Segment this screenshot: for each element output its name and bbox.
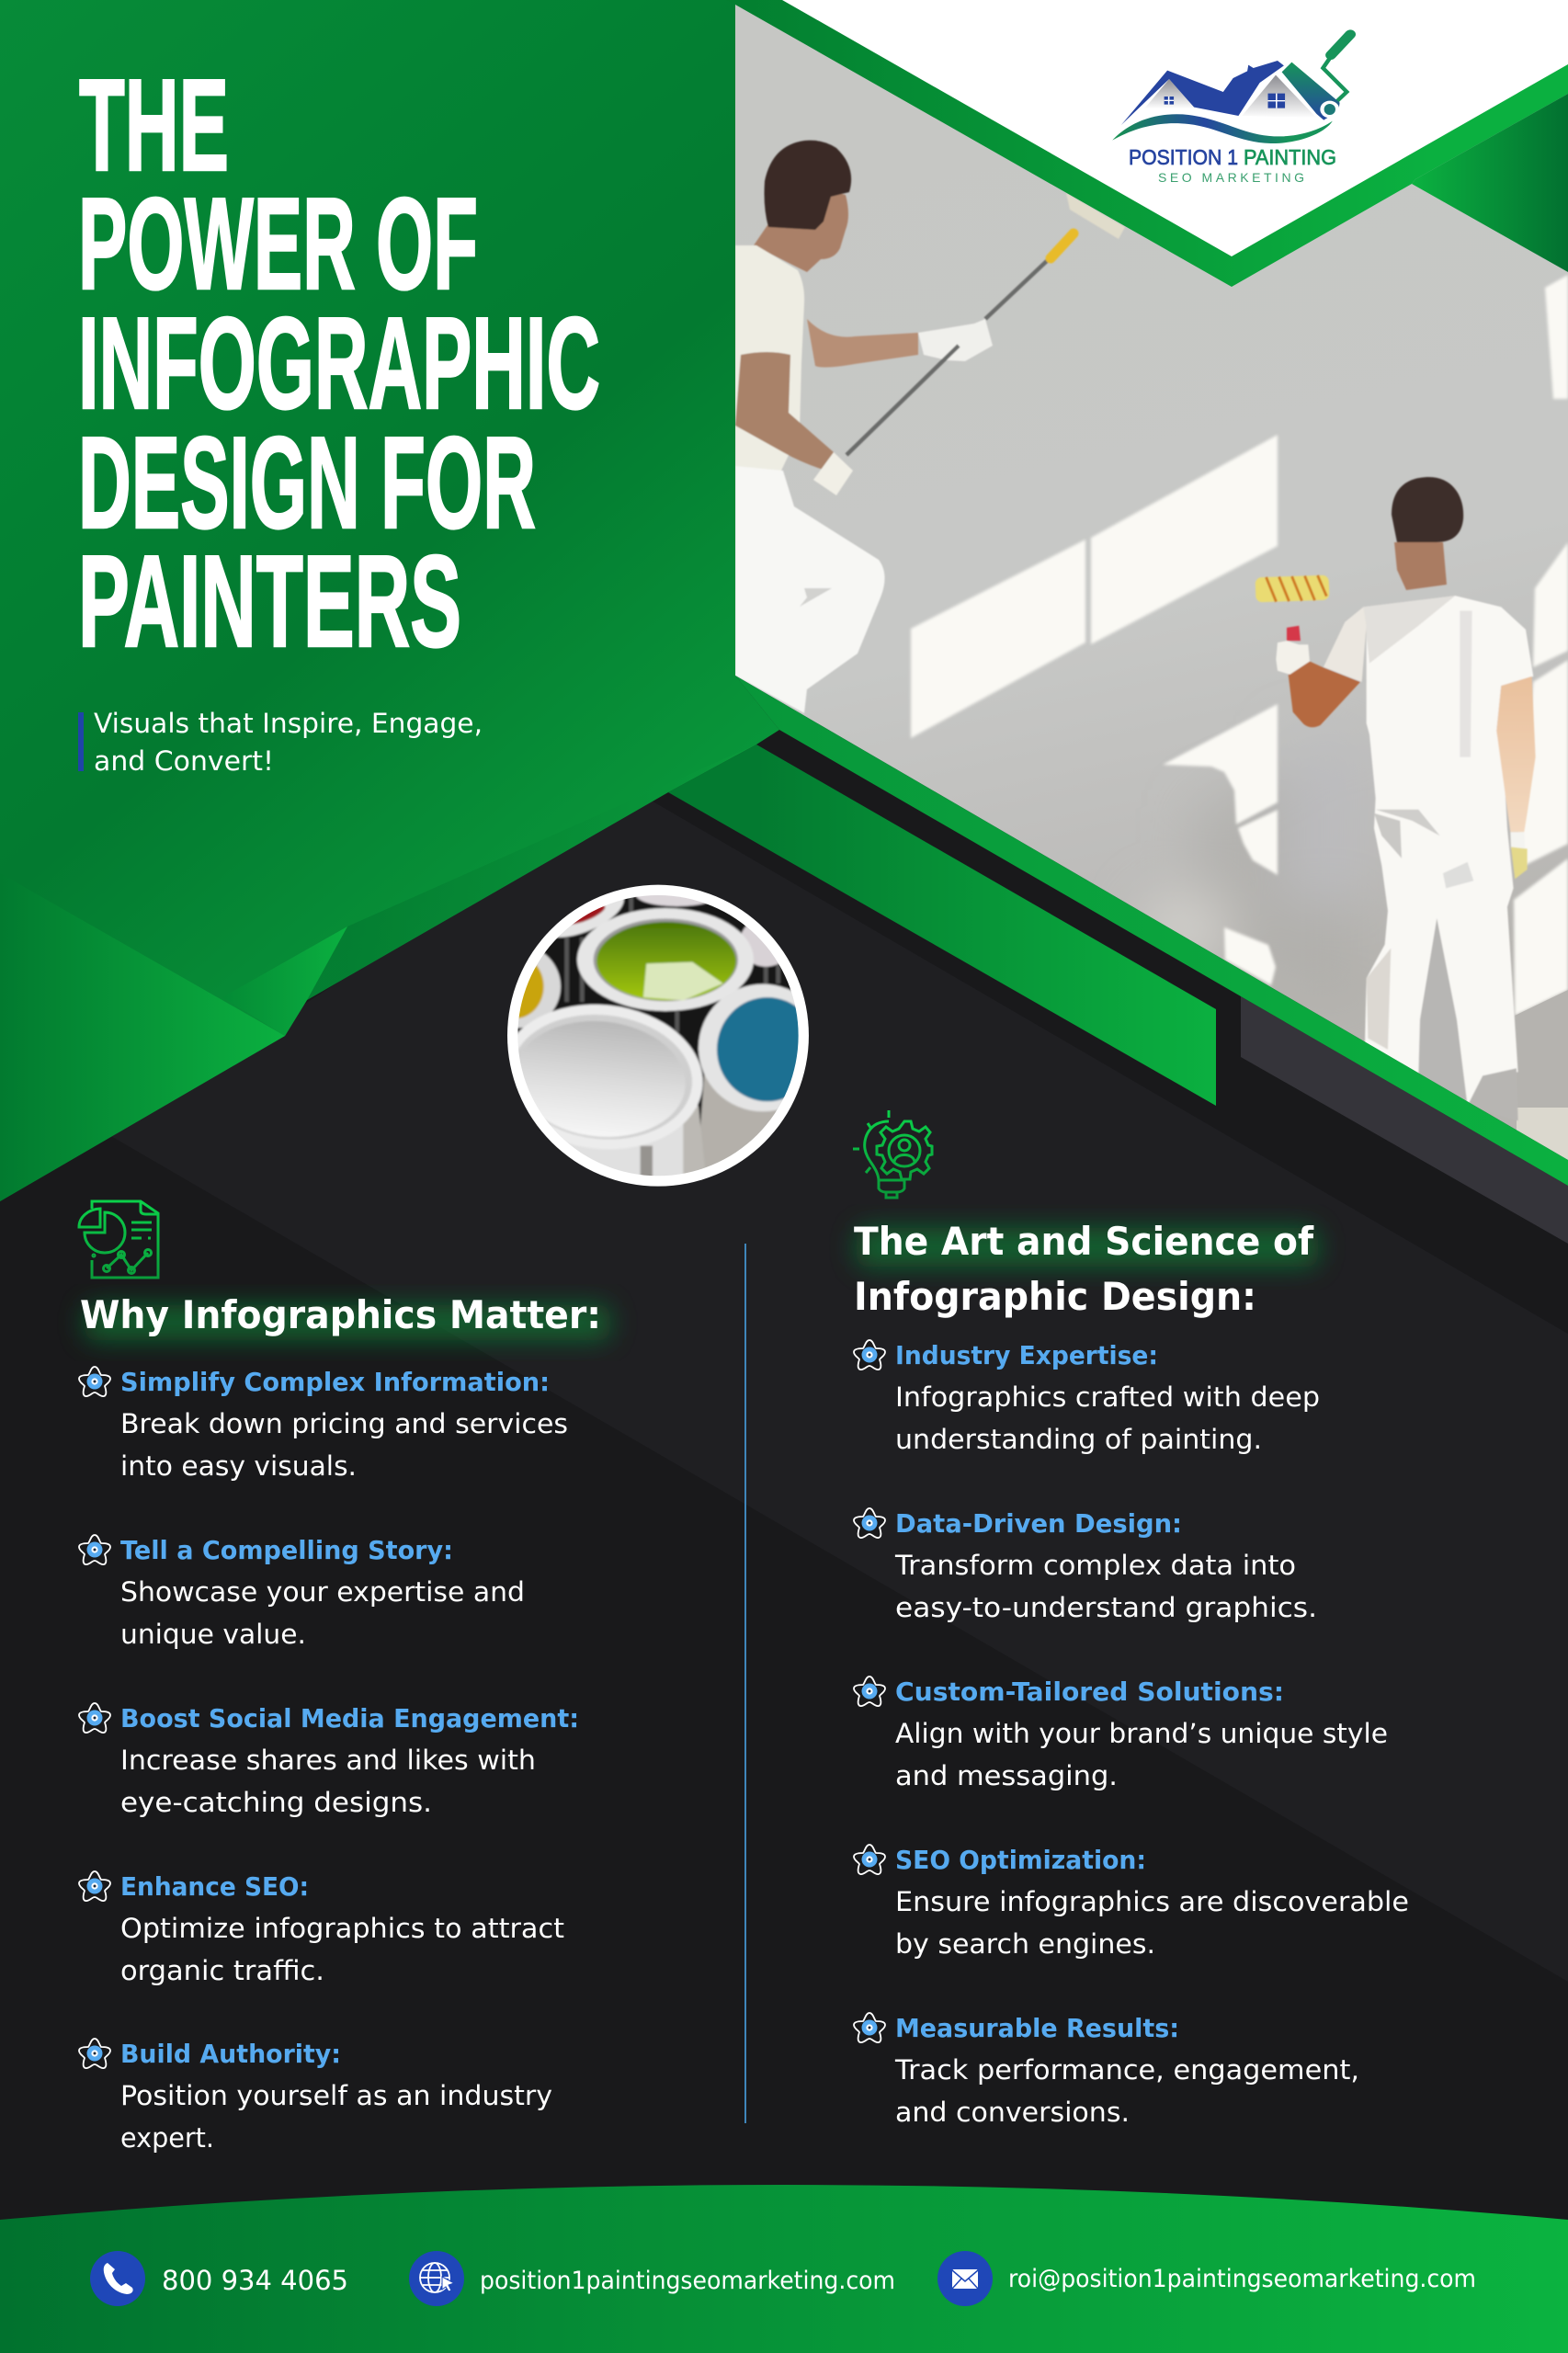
black stripe below main band — [634, 730, 1568, 1334]
gap between legs — [1418, 918, 1468, 1106]
logo wordmark blue: POSITION 1 — [1129, 145, 1238, 169]
item: custom-tailored solutions: Align with your brand’s unique style — [895, 1718, 1388, 1749]
wall — [735, 0, 1568, 1195]
item: measurable results: and conversions. — [895, 2097, 1130, 2128]
item: build authority: Position yourself as an industry — [120, 2080, 552, 2111]
torso and legs — [1276, 596, 1536, 1151]
dark green corner — [1412, 94, 1568, 272]
cans — [478, 873, 827, 1195]
logo wordmark green: PAINTING — [1244, 145, 1336, 169]
contact: phone — [90, 2251, 348, 2306]
roof — [1121, 61, 1284, 125]
phone number: 800 934 4065 — [162, 2265, 348, 2296]
roller — [1282, 63, 1340, 120]
lower wall to the right — [1515, 990, 1568, 1017]
item: simplify complex information: Simplify Complex Information: — [120, 1367, 550, 1397]
item: tell a compelling story: unique value. — [120, 1619, 306, 1650]
column divider — [744, 1244, 746, 2123]
painter on the right — [1256, 477, 1536, 1151]
white can body — [542, 1073, 699, 1195]
icon: envelope — [937, 2251, 993, 2306]
hair — [1392, 477, 1463, 542]
blue paint — [717, 997, 818, 1101]
title: PAINTERS — [78, 529, 461, 675]
item: data-driven design: easy-to-understand graphics. — [895, 1592, 1317, 1623]
item: enhance SEO — [79, 1871, 564, 1986]
heading: The Art and Science of — [854, 1219, 1314, 1264]
gloves — [918, 319, 993, 361]
hair — [765, 141, 851, 230]
subtitle accent bar — [78, 712, 84, 771]
gradient green band — [668, 745, 1216, 1106]
white roller — [1066, 193, 1125, 239]
item: SEO optimization: SEO Optimization: — [895, 1845, 1146, 1875]
item: data-driven design: Transform complex data into — [894, 1550, 1296, 1581]
roller handle — [1323, 49, 1346, 108]
roller pole — [846, 259, 1049, 455]
far arm — [807, 319, 918, 368]
roller sleeve — [1256, 575, 1329, 602]
yellow handle — [1051, 233, 1074, 258]
panel: why infographics matter — [79, 1201, 610, 2154]
icon: lightbulb with gear and person — [853, 1110, 932, 1198]
item: build authority: expert. — [120, 2122, 214, 2154]
white paint — [510, 1013, 691, 1145]
wall shading — [1140, 807, 1267, 963]
item: data-driven design — [854, 1508, 1317, 1623]
forearm — [1289, 662, 1360, 727]
item: custom-tailored solutions: and messaging. — [895, 1760, 1118, 1791]
lighter strip along panel edge — [307, 745, 756, 1000]
white logo chevron — [782, 0, 1568, 256]
item: SEO optimization: Ensure infographics are discoverable — [895, 1886, 1409, 1917]
near arm — [735, 352, 834, 472]
green chevron band — [726, 0, 1568, 287]
fold shadows — [1460, 610, 1472, 757]
paint cans circle photo — [478, 873, 827, 1195]
green paint — [597, 922, 736, 1000]
main green diagonal band — [735, 676, 1568, 1186]
top pale can — [636, 883, 719, 906]
right arm — [1496, 676, 1536, 832]
contact: email — [937, 2251, 1476, 2306]
title: THE — [79, 52, 229, 199]
green reflection — [643, 962, 723, 1000]
icon: document with charts — [79, 1201, 158, 1278]
subtitle: Visuals that Inspire, Engage, — [94, 708, 483, 739]
logo tagline: SEO MARKETING — [1158, 170, 1304, 185]
floor — [1517, 1108, 1568, 1160]
white ring — [507, 885, 809, 1187]
pants — [735, 466, 885, 713]
red can — [534, 879, 631, 948]
item: measurable results: Measurable Results: — [895, 2013, 1179, 2043]
item: boost social media engagement: Increase shares and likes with — [120, 1745, 536, 1776]
neck and face — [754, 188, 848, 272]
heading: Infographic Design: — [854, 1274, 1256, 1319]
sleeve — [1324, 607, 1367, 682]
item: custom-tailored solutions — [854, 1677, 1388, 1791]
shirt — [735, 245, 804, 471]
icon: phone — [90, 2251, 145, 2306]
item: enhance SEO: organic traffic. — [120, 1955, 324, 1986]
item: SEO optimization: by search engines. — [895, 1928, 1155, 1960]
yellow striped roller — [1256, 575, 1329, 602]
item: enhance SEO: Enhance SEO: — [120, 1871, 309, 1902]
item: simplify complex information: into easy visuals. — [120, 1450, 357, 1482]
item: custom-tailored solutions: Custom-Tailored Solutions: — [895, 1677, 1284, 1707]
item: industry expertise: understanding of painting. — [895, 1424, 1262, 1455]
item: build authority: Build Authority: — [120, 2039, 341, 2069]
item: measurable results — [854, 2013, 1359, 2128]
green can rim — [577, 908, 754, 1011]
item: data-driven design: Data-Driven Design: — [895, 1508, 1182, 1539]
footer band — [0, 2185, 1568, 2353]
item: industry expertise: Infographics crafted with deep — [895, 1381, 1320, 1413]
item: industry expertise — [854, 1340, 1320, 1455]
item: tell a compelling story — [79, 1535, 525, 1650]
bright left wedge — [0, 873, 285, 1201]
title — [78, 52, 600, 675]
logo: Position 1 Painting SEO Marketing — [1112, 34, 1350, 185]
work glove — [1510, 832, 1525, 849]
heading glow — [857, 1228, 1318, 1267]
white glove — [1276, 641, 1310, 675]
photo: two painters rolling a wall — [735, 0, 1568, 1195]
panel: the art and science of infographic design — [853, 1110, 1409, 2128]
lighter diagonal background panel — [0, 790, 1568, 1982]
heading — [854, 1219, 1314, 1319]
item: boost social media engagement: eye-catching designs. — [120, 1787, 432, 1818]
right pale can — [740, 917, 792, 967]
logo mark — [1112, 34, 1350, 143]
dark can sides — [567, 892, 778, 1032]
title: DESIGN FOR — [78, 410, 536, 556]
subtitle — [94, 708, 483, 777]
yellow can — [478, 945, 561, 1028]
item: tell a compelling story: Showcase your expertise and — [120, 1576, 525, 1608]
shadow on shoulders — [1363, 596, 1455, 664]
blue can body — [696, 1069, 818, 1195]
item: enhance SEO: Optimize infographics to attract — [120, 1913, 564, 1944]
white can rim — [494, 995, 710, 1159]
icon: globe — [409, 2251, 464, 2306]
shirt and trousers silhouette — [1363, 596, 1533, 1151]
heading: Why Infographics Matter: — [80, 1292, 601, 1337]
neck — [1394, 542, 1447, 590]
gables — [1144, 79, 1196, 108]
sunlight window patches — [911, 275, 1568, 1016]
title: INFOGRAPHIC — [78, 290, 600, 437]
item: boost social media engagement: Boost Social Media Engagement: — [120, 1703, 579, 1733]
email address: roi@position1paintingseomarketing.com — [1008, 2265, 1476, 2293]
red handle — [1287, 626, 1301, 641]
item: industry expertise: Industry Expertise: — [895, 1340, 1158, 1370]
left green panel — [0, 0, 779, 1201]
small accent triangle — [222, 926, 347, 1036]
item: simplify complex information — [79, 1367, 568, 1482]
heading glow — [85, 1305, 610, 1340]
subtitle: and Convert! — [94, 745, 274, 777]
title: POWER OF — [78, 171, 478, 317]
painter on the left — [735, 141, 1125, 713]
contact: website — [409, 2251, 895, 2306]
swoosh — [1112, 114, 1333, 143]
item: boost social media engagement — [79, 1703, 579, 1818]
item: tell a compelling story: Tell a Compelling Story: — [120, 1535, 453, 1565]
item: build authority — [79, 2039, 552, 2154]
grey stripe — [1241, 996, 1568, 1244]
website address: position1paintingseomarketing.com — [480, 2267, 895, 2295]
item: SEO optimization — [854, 1845, 1409, 1960]
windows — [1165, 94, 1285, 108]
item: measurable results: Track performance, engagement, — [894, 2054, 1359, 2086]
blue can rim — [699, 984, 827, 1111]
item: simplify complex information: Break down pricing and services — [120, 1408, 568, 1439]
